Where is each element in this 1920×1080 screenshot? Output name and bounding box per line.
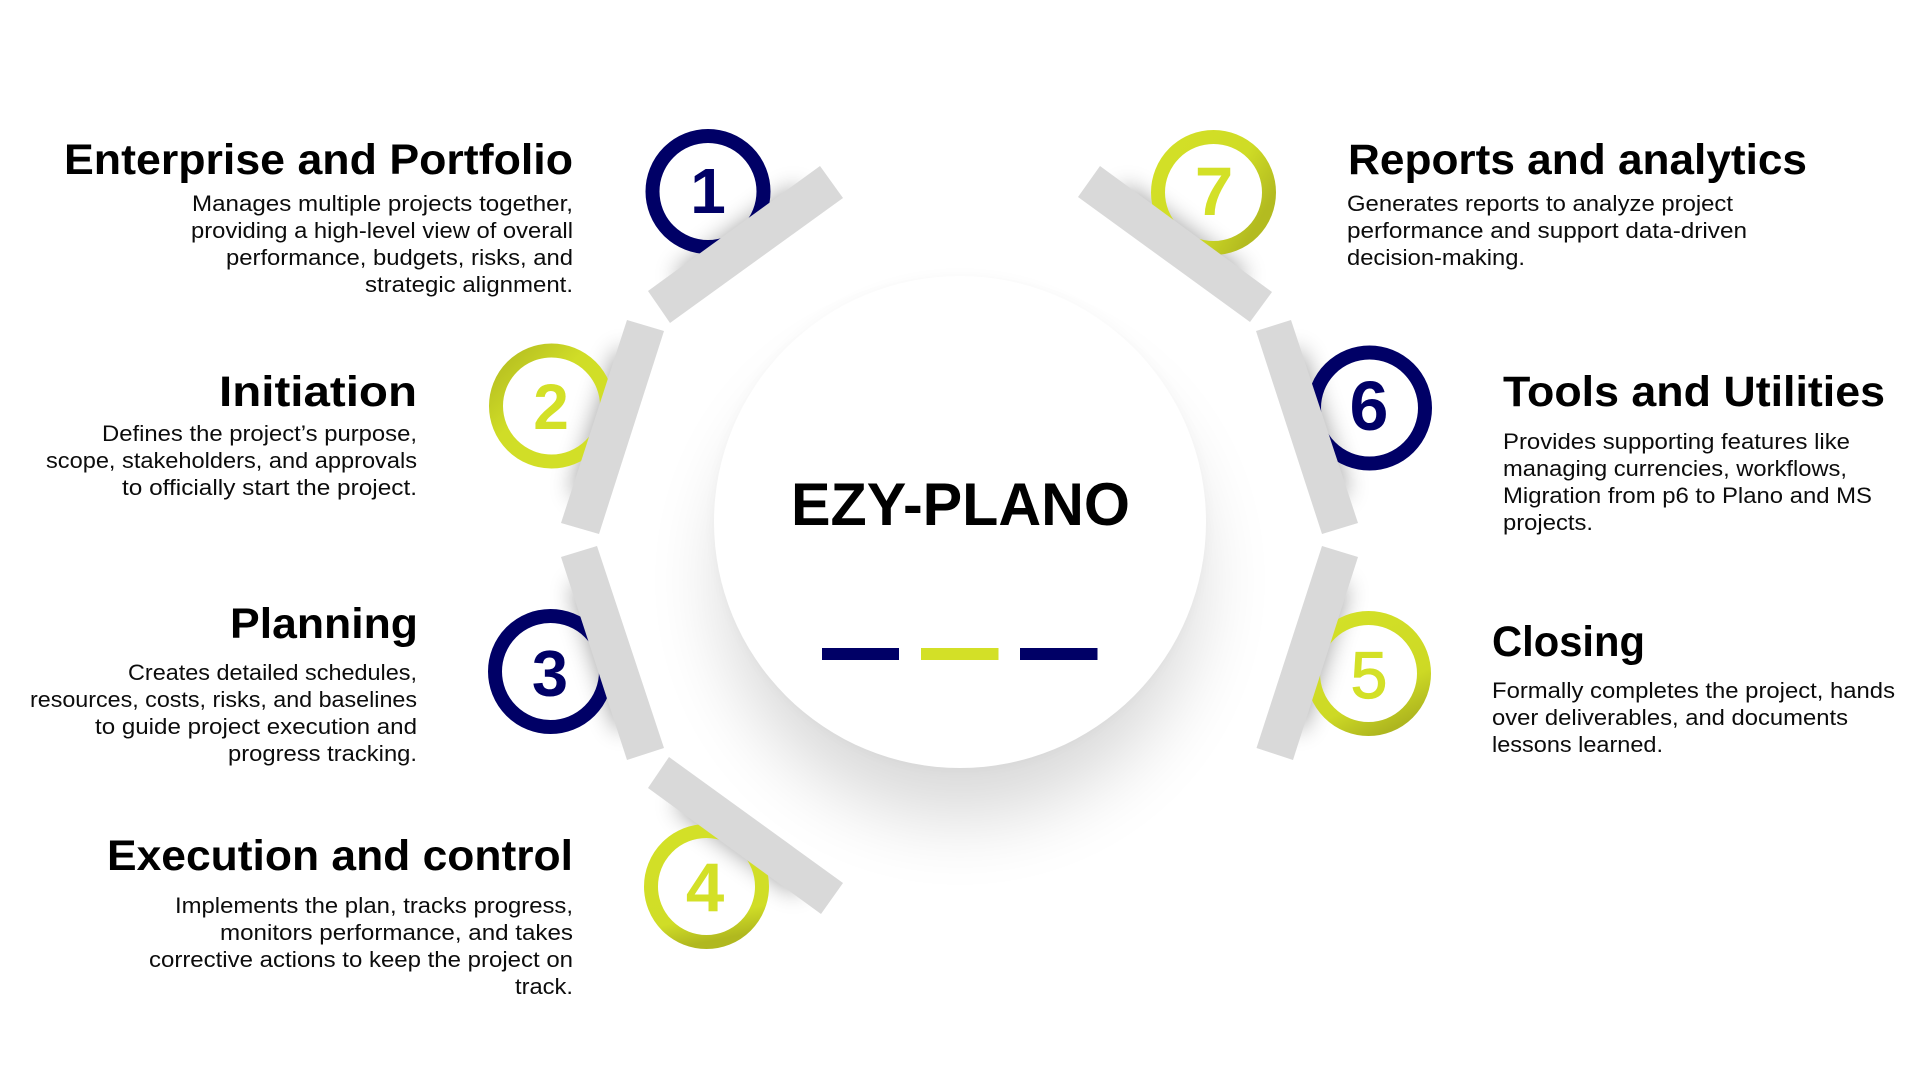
panel: Reports and analytics: performance and support data-driven bbox=[1347, 218, 1747, 243]
panel: Reports and analytics bbox=[1347, 136, 1807, 270]
panel: Tools and Utilities: Tools and Utilities bbox=[1503, 368, 1885, 416]
panel: Closing: over deliverables, and documents bbox=[1492, 705, 1848, 730]
panel: Tools and Utilities: projects. bbox=[1503, 510, 1593, 535]
panel: Enterprise and Portfolio bbox=[64, 136, 573, 297]
panel: Initiation bbox=[46, 368, 417, 500]
number badge 6 bbox=[1314, 352, 1425, 464]
panel: Closing: lessons learned. bbox=[1492, 732, 1663, 757]
segmented grey ring bars bbox=[561, 166, 1358, 914]
number badge 7 bbox=[1158, 137, 1269, 248]
number badge 5 bbox=[1313, 618, 1424, 729]
number badge 3: 3 bbox=[532, 637, 568, 710]
panel: Enterprise and Portfolio: performance, budgets, risks, and bbox=[226, 245, 573, 270]
panel: Initiation: scope, stakeholders, and approvals bbox=[46, 448, 417, 473]
number badge 7: 7 bbox=[1195, 153, 1233, 230]
bar shadows bbox=[571, 185, 1348, 894]
panel: Execution and control: corrective actions to keep the project on bbox=[149, 947, 573, 972]
panel: Initiation: Initiation bbox=[219, 368, 417, 416]
panel: Planning: to guide project execution and bbox=[95, 714, 417, 739]
panel: Execution and control: Implements the plan, tracks progress, bbox=[175, 893, 573, 918]
number badge 2 bbox=[496, 350, 607, 462]
panel: Reports and analytics: decision-making. bbox=[1347, 245, 1525, 270]
number badge 5: 5 bbox=[1351, 638, 1387, 712]
panel: Enterprise and Portfolio: Enterprise and Portfolio bbox=[64, 136, 573, 184]
panel: Tools and Utilities: managing currencies, workflows, bbox=[1503, 456, 1847, 481]
panel: Initiation: Defines the project’s purpose, bbox=[102, 421, 417, 446]
panel: Execution and control bbox=[107, 832, 573, 999]
central title: EZY-PLANO bbox=[791, 471, 1130, 538]
panel: Closing: Closing bbox=[1492, 618, 1645, 666]
panel: Planning: resources, costs, risks, and baselines bbox=[30, 687, 417, 712]
shadow of centre circle bbox=[712, 274, 1208, 818]
number badge 2: 2 bbox=[533, 371, 569, 443]
panel: Reports and analytics: Generates reports to analyze project bbox=[1347, 191, 1734, 216]
panel: Execution and control: track. bbox=[515, 974, 573, 999]
panel: Execution and control: Execution and control bbox=[107, 832, 573, 880]
panel: Planning: Planning bbox=[230, 600, 418, 648]
number badge 1: 1 bbox=[690, 155, 726, 227]
panel: Reports and analytics: Reports and analytics bbox=[1348, 136, 1807, 184]
panel: Execution and control: monitors performance, and takes bbox=[220, 920, 573, 945]
panel: Initiation: to officially start the project. bbox=[122, 475, 417, 500]
number badge 1 bbox=[652, 136, 764, 247]
panel: Tools and Utilities: Migration from p6 to Plano and MS bbox=[1503, 483, 1872, 508]
panel: Enterprise and Portfolio: strategic alignment. bbox=[365, 272, 573, 297]
number badge 6: 6 bbox=[1350, 367, 1388, 445]
panel: Planning: progress tracking. bbox=[228, 741, 417, 766]
panel: Planning: Creates detailed schedules, bbox=[128, 660, 417, 685]
number badge 4 bbox=[651, 831, 762, 942]
panel: Planning bbox=[30, 600, 418, 766]
tri-colour dash divider bbox=[822, 648, 1098, 660]
panel: Closing: Formally completes the project, hands bbox=[1492, 678, 1895, 703]
panel: Enterprise and Portfolio: providing a high-level view of overall bbox=[191, 218, 573, 243]
panel: Tools and Utilities: Provides supporting features like bbox=[1503, 429, 1850, 454]
panel: Closing bbox=[1492, 618, 1895, 757]
panel: Tools and Utilities bbox=[1503, 368, 1885, 535]
number badge 3 bbox=[495, 616, 606, 727]
number badge 4: 4 bbox=[686, 849, 724, 926]
panel: Enterprise and Portfolio: Manages multiple projects together, bbox=[192, 191, 573, 216]
centre circle bbox=[714, 276, 1206, 768]
